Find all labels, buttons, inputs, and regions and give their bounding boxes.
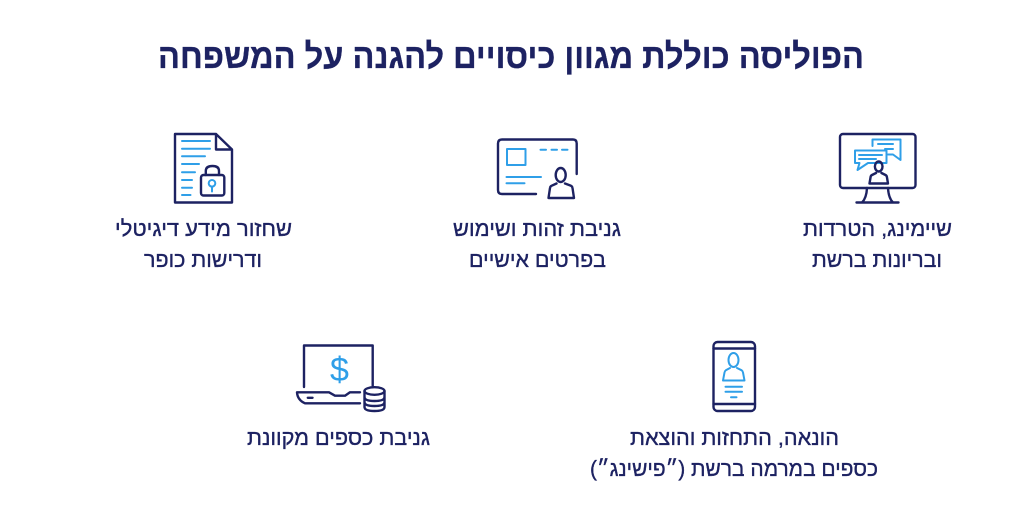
text: cyberbullying label: שיימינג, הטרדות [803,216,952,241]
text: phishing label: כספים במרמה ברשת (״פישינג״) [590,456,878,481]
panel: online money theft [247,346,430,450]
text: cyberbullying label: ובריונות ברשת [812,247,942,272]
icon: laptop with dollar and coins: $ [330,351,349,389]
icon: laptop with dollar and coins [297,346,384,411]
text: ransomware label [115,216,292,272]
icon: smartphone with person [714,342,755,411]
text: ransomware label: שחזור מידע דיגיטלי [115,216,292,241]
text: ransomware label: ודרישות כופר [144,247,262,272]
icon: document with padlock [175,134,232,202]
text: phishing label [590,425,878,481]
text: identity theft label: גניבת זהות ושימוש [453,216,621,241]
text: identity theft label: בפרטים אישיים [469,247,606,272]
panel: ransomware [115,134,292,272]
panel: identity theft [453,140,621,272]
panel: phishing [590,342,878,481]
icon: monitor with chat bubbles [840,134,916,202]
text: cyberbullying label [803,216,952,272]
icon: ID card with person [498,140,577,198]
text: online money theft label: גניבת כספים מקוונת [247,425,430,450]
panel: cyberbullying [803,134,952,272]
title: הפוליסה כוללת מגוון כיסויים להגנה על המשפחה [158,37,864,76]
text: identity theft label [453,216,621,272]
text: phishing label: הונאה, התחזות והוצאת [630,425,839,450]
